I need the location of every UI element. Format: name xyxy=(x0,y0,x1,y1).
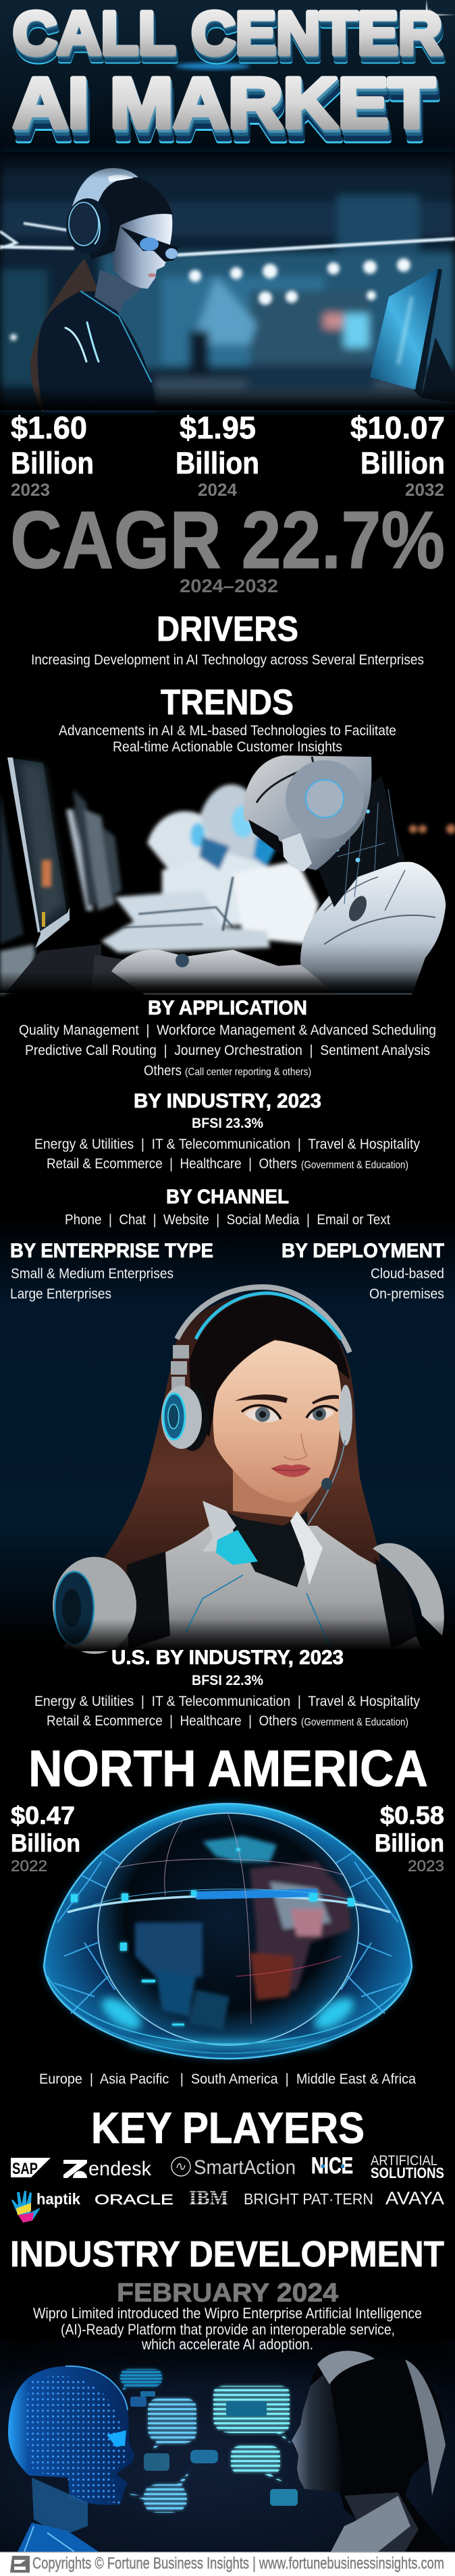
meridians xyxy=(115,1814,344,2024)
neck xyxy=(95,270,145,313)
stat: 2023: 2023 xyxy=(11,480,50,500)
date: FEBRUARY 2024 xyxy=(117,2279,338,2308)
side circuit lines xyxy=(54,1852,402,2013)
by industry list: Retail & Ecommerce | Healthcare | Others xyxy=(47,1155,297,1172)
face xyxy=(111,202,172,289)
trends text: Real-time Actionable Customer Insights xyxy=(113,739,342,755)
outer bowl xyxy=(44,1804,412,2059)
ponytail xyxy=(30,258,101,411)
logo: haptik: haptik xyxy=(36,2190,80,2208)
woman silhouette xyxy=(292,2351,451,2552)
mic boom xyxy=(306,1440,345,1528)
top fade of background xyxy=(0,2337,455,2371)
headband xyxy=(177,1287,350,1352)
sparkle xyxy=(404,0,455,20)
lower bright glows xyxy=(97,1991,359,2048)
by deployment: BY DEPLOYMENT xyxy=(282,1240,444,1262)
glow under title xyxy=(176,63,250,69)
face xyxy=(213,1340,342,1503)
by channel list: Phone | Chat | Website | Social Media | Email or Text xyxy=(65,1211,390,1228)
neck xyxy=(233,1464,321,1518)
Wipro text xyxy=(33,2305,422,2353)
bottom illustration xyxy=(0,2337,455,2552)
by enterprise type: BY ENTERPRISE TYPE xyxy=(10,1240,213,1262)
horizontal neon lines xyxy=(0,223,455,255)
ear cup xyxy=(66,198,109,254)
stat: North America 2022: $0.47 xyxy=(11,1802,75,1829)
by deployment xyxy=(282,1240,444,1302)
stat: 2023 xyxy=(11,410,94,500)
equator band xyxy=(68,1889,390,1912)
stat: 2032 xyxy=(350,410,445,500)
helmet dark seam xyxy=(257,757,314,803)
collar xyxy=(203,1501,323,1587)
logo: SAP: SAP xyxy=(12,2160,38,2178)
lips xyxy=(271,1464,311,1477)
AI neck and shoulder xyxy=(18,2478,99,2552)
right ear cup xyxy=(339,1385,352,1446)
stat: North America 2023 xyxy=(375,1802,444,1874)
headband xyxy=(72,168,138,209)
header background xyxy=(0,0,455,162)
title xyxy=(13,0,442,143)
stat: North America 2023: $0.58 xyxy=(380,1802,444,1829)
Wipro text: (AI)-Ready Platform that provide an interoperable service, xyxy=(61,2321,395,2338)
logo: Artificial Solutions: ARTIFICIAL xyxy=(371,2153,437,2169)
by application list xyxy=(19,1022,436,1079)
US BFSI share: BFSI 22.3% xyxy=(192,1673,263,1688)
distant orange lights xyxy=(409,824,455,834)
by application list: (Call center reporting & others) xyxy=(185,1066,311,1078)
BFSI share: BFSI 23.3% xyxy=(192,1116,263,1131)
logo: SmartAction: SmartAction xyxy=(194,2156,296,2179)
Wipro text: which accelerate AI adoption. xyxy=(141,2336,313,2353)
logo: Avaya: AVAYA xyxy=(385,2188,444,2208)
fade xyxy=(0,971,455,993)
torso xyxy=(38,291,157,413)
bottom fade xyxy=(0,386,455,410)
neck wires xyxy=(317,776,405,907)
logo: Zendesk: endesk xyxy=(88,2158,152,2180)
band lights xyxy=(71,1848,354,2026)
drivers heading: DRIVERS xyxy=(157,610,298,649)
robot agents image xyxy=(0,755,455,995)
outer glow xyxy=(44,1804,412,2059)
stat: 2024: Billion xyxy=(176,446,259,480)
right eye xyxy=(306,1406,338,1421)
stat: North America 2022: 2022 xyxy=(11,1857,47,1874)
stat: 2023: Billion xyxy=(11,446,94,480)
lips xyxy=(148,273,156,277)
torso creases xyxy=(324,870,435,944)
robot dark separators xyxy=(122,877,233,931)
keyboard and desk xyxy=(7,944,152,992)
by enterprise type xyxy=(10,1240,213,1302)
left eye xyxy=(242,1405,281,1423)
by enterprise type: Small & Medium Enterprises xyxy=(11,1265,173,1282)
logo: Artificial Solutions xyxy=(371,2153,444,2181)
logo: NICE: NICE xyxy=(311,2153,353,2179)
hair xyxy=(84,169,173,260)
trends text: Advancements in AI & ML-based Technologies to Facilitate xyxy=(59,723,396,739)
by industry list: Energy & Utilities | IT & Telecommunication | Travel & Hospitality xyxy=(34,1136,420,1152)
bokeh lights xyxy=(10,258,410,341)
glasses xyxy=(120,227,178,262)
eyebrows xyxy=(235,1394,339,1404)
stat: 2023: $1.60 xyxy=(11,410,87,445)
stat: 2024: 2024 xyxy=(198,480,238,500)
North America heading: NORTH AMERICA xyxy=(28,1740,428,1798)
stat: 2032: Billion xyxy=(360,446,445,480)
monitor xyxy=(370,268,455,402)
bowl rims xyxy=(47,1976,408,2053)
logo: Oracle: ORACLE xyxy=(95,2192,173,2208)
logo: haptik xyxy=(11,2190,80,2223)
US by industry heading: U.S. BY INDUSTRY, 2023 xyxy=(111,1647,344,1669)
by industry list: (Government & Education) xyxy=(301,1160,408,1171)
dark hair top xyxy=(189,1296,350,1437)
globe illustration xyxy=(44,1804,412,2059)
main robot helmet xyxy=(244,755,371,870)
monitors row xyxy=(66,789,122,911)
US by industry list: Retail & Ecommerce | Healthcare | Others xyxy=(47,1713,297,1729)
title: CALL CENTER xyxy=(13,0,442,67)
far left screen xyxy=(0,757,70,995)
hero top fade xyxy=(0,152,455,179)
inner sphere xyxy=(98,1813,358,2045)
main robot forearm xyxy=(111,950,338,995)
footer xyxy=(0,2552,455,2576)
title: AI MARKET xyxy=(13,63,435,143)
wrist watch xyxy=(176,954,189,967)
stat: 2032: 2032 xyxy=(405,480,444,500)
hero image: agent with headset xyxy=(0,152,455,413)
right shoulder joint xyxy=(373,1543,444,1649)
visor xyxy=(248,820,282,855)
by deployment: On-premises xyxy=(369,1286,444,1302)
left ear cup xyxy=(161,1385,209,1451)
trends heading: TRENDS xyxy=(161,683,294,722)
footer logo xyxy=(10,2556,30,2573)
stat: 2032: $10.07 xyxy=(350,410,445,445)
by enterprise type: Large Enterprises xyxy=(10,1286,111,1302)
by industry list xyxy=(34,1136,420,1172)
by application heading: BY APPLICATION xyxy=(148,997,307,1019)
other regions: Europe | Asia Pacific | South America | Middle East & Africa xyxy=(39,2071,416,2087)
logo: IBM: IBM xyxy=(189,2187,228,2209)
by deployment: Cloud-based xyxy=(371,1265,444,1282)
shoulder recess xyxy=(346,893,370,924)
stat: North America 2023: Billion xyxy=(375,1829,444,1857)
headband segments xyxy=(171,1345,189,1390)
US by industry list: (Government & Education) xyxy=(301,1717,408,1728)
long hair back xyxy=(54,1295,381,1619)
trends text xyxy=(59,723,396,755)
left shoulder joint xyxy=(53,1551,170,1654)
robot woman illustration xyxy=(0,1287,455,1654)
US by industry list xyxy=(34,1693,420,1729)
key players heading: KEY PLAYERS xyxy=(91,2103,365,2152)
logo: Artificial Solutions: SOLUTIONS xyxy=(371,2165,444,2181)
headphone disc xyxy=(286,760,364,838)
by application list: Others xyxy=(144,1062,182,1079)
lower fade xyxy=(0,1619,455,1651)
by industry heading: BY INDUSTRY, 2023 xyxy=(134,1090,321,1112)
US by industry list: Energy & Utilities | IT & Telecommunication | Travel & Hospitality xyxy=(34,1693,420,1709)
drivers text: Increasing Development in AI Technology across Several Enterprises xyxy=(31,652,424,668)
AI head xyxy=(8,2366,135,2505)
stat: 2024: $1.95 xyxy=(180,410,256,445)
body blue seam xyxy=(186,1575,331,1649)
stat: North America 2022: Billion xyxy=(11,1829,80,1857)
face mask xyxy=(282,833,312,871)
hero background blur xyxy=(0,152,455,411)
stat: North America 2022 xyxy=(11,1802,80,1874)
bottom background xyxy=(0,2341,455,2552)
stat: North America 2023: 2023 xyxy=(408,1857,444,1874)
by channel heading: BY CHANNEL xyxy=(166,1186,289,1208)
cyan chest panel xyxy=(216,1530,258,1565)
navy backdrop xyxy=(0,1218,455,1649)
globe map glows xyxy=(135,1836,351,2030)
speech bubbles xyxy=(120,2369,298,2513)
suit neon lines xyxy=(65,291,151,382)
main robot torso xyxy=(300,862,446,995)
CAGR period: 2024–2032 xyxy=(180,575,278,596)
stat: 2024 xyxy=(176,410,259,500)
robot torso xyxy=(61,1526,422,1649)
nose xyxy=(284,1433,307,1460)
back robots xyxy=(101,784,319,952)
logo: Bright Pattern: BRIGHT PAT·TERN xyxy=(244,2190,373,2208)
